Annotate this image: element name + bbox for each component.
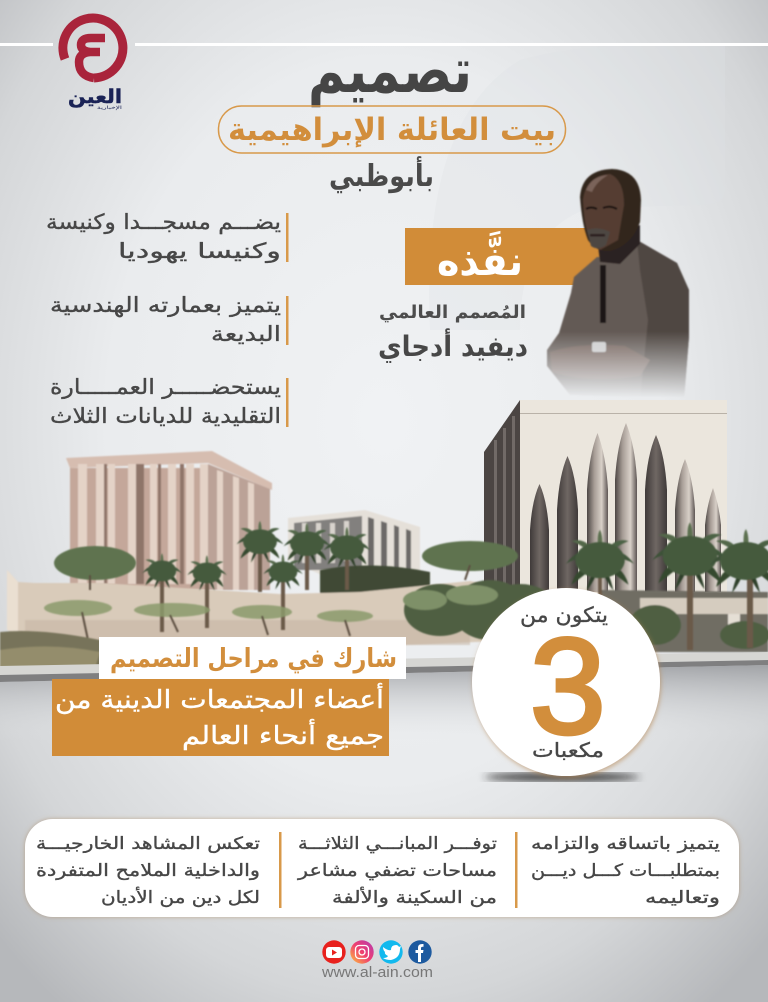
fact 3: تعكس المشاهد الخارجيـــة bbox=[36, 834, 260, 854]
landscape right: pavilion bbox=[403, 580, 768, 652]
landscape left: wall bbox=[7, 565, 520, 650]
road and reflection bbox=[0, 652, 768, 742]
executed-by banner: نفَّذه bbox=[437, 230, 523, 285]
icon: facebook bbox=[408, 940, 432, 964]
website url: www.al-ain.com bbox=[321, 964, 433, 981]
faint background logo shape bbox=[429, 44, 725, 330]
designer name: ديفيد أدجاي bbox=[378, 328, 528, 363]
icon: twitter bbox=[379, 940, 403, 964]
bullet 2 bbox=[50, 293, 288, 346]
bullet 1: يضـــم مسجـــدا وكنيسة bbox=[46, 210, 281, 235]
subtitle location: بأبوظبي bbox=[329, 156, 434, 194]
icon: instagram bbox=[350, 940, 374, 964]
fact 3: لكل دين من الأديان bbox=[101, 887, 260, 908]
subtitle pill: بيت العائلة الإبراهيمية bbox=[228, 112, 556, 148]
fact 1: يتميز باتساقه والتزامه bbox=[531, 834, 720, 854]
logo: Al-Ain: العين bbox=[68, 86, 122, 108]
icon: youtube bbox=[322, 940, 346, 964]
portrait: David Adjaye bbox=[547, 169, 689, 400]
fact 2: توفـــر المبانـــي الثلاثـــة bbox=[298, 834, 497, 854]
fact 3: والداخلية الملامح المتفردة bbox=[36, 861, 260, 881]
executed-by banner bbox=[405, 228, 605, 285]
bullet 1 bbox=[46, 210, 288, 263]
circle badge: 3 cubes: 3 bbox=[530, 610, 606, 762]
social icons bbox=[322, 940, 432, 964]
bullet 1: وكنيسا يهوديا bbox=[118, 239, 281, 263]
circle badge: 3 cubes: يتكون من bbox=[520, 603, 608, 627]
callout: participated in design: جميع أنحاء العالم bbox=[182, 718, 384, 751]
building: small cube centre bbox=[288, 510, 420, 592]
building: kiln cube left bbox=[66, 451, 272, 590]
fact 3 bbox=[36, 834, 260, 908]
logo: Al-Ain: الإخبارية bbox=[97, 106, 122, 111]
bullet 2: البديعة bbox=[211, 322, 281, 346]
arches bbox=[530, 423, 721, 592]
badge ground shadow bbox=[484, 773, 640, 781]
callout: participated in design bbox=[52, 637, 406, 756]
fact 2: مساحات تضفي مشاعر bbox=[297, 861, 497, 881]
fact 1 bbox=[531, 834, 720, 908]
designer label: المُصمم العالمي bbox=[379, 302, 526, 323]
circle badge: 3 cubes: مكعبات bbox=[532, 738, 604, 762]
logo: Al-Ain bbox=[63, 18, 123, 111]
bullet 3: يستحضـــــر العمـــــارة bbox=[50, 375, 281, 399]
title: تصميم bbox=[308, 34, 472, 107]
circle badge: 3 cubes bbox=[472, 588, 660, 781]
building: arched cube right bbox=[484, 400, 727, 595]
callout: participated in design: أعضاء المجتمعات الدينية من bbox=[55, 682, 384, 714]
bullet 3 bbox=[50, 375, 288, 428]
fact 2: من السكينة والألفة bbox=[332, 887, 497, 908]
callout: participated in design: شارك في مراحل التصميم bbox=[110, 644, 397, 674]
fact 1: وتعاليمه bbox=[645, 888, 720, 908]
bottom facts card bbox=[25, 819, 739, 917]
top white rule bbox=[0, 43, 768, 46]
bullet 2: يتميز بعمارته الهندسية bbox=[50, 293, 281, 317]
palm trees bbox=[142, 521, 768, 650]
bullet 3: التقليدية للديانات الثلاث bbox=[50, 404, 281, 428]
fact 1: بمتطلبـــات كـــل ديـــن bbox=[531, 861, 720, 881]
acacia trees and shrubs bbox=[0, 541, 518, 670]
fact 2 bbox=[297, 834, 497, 908]
